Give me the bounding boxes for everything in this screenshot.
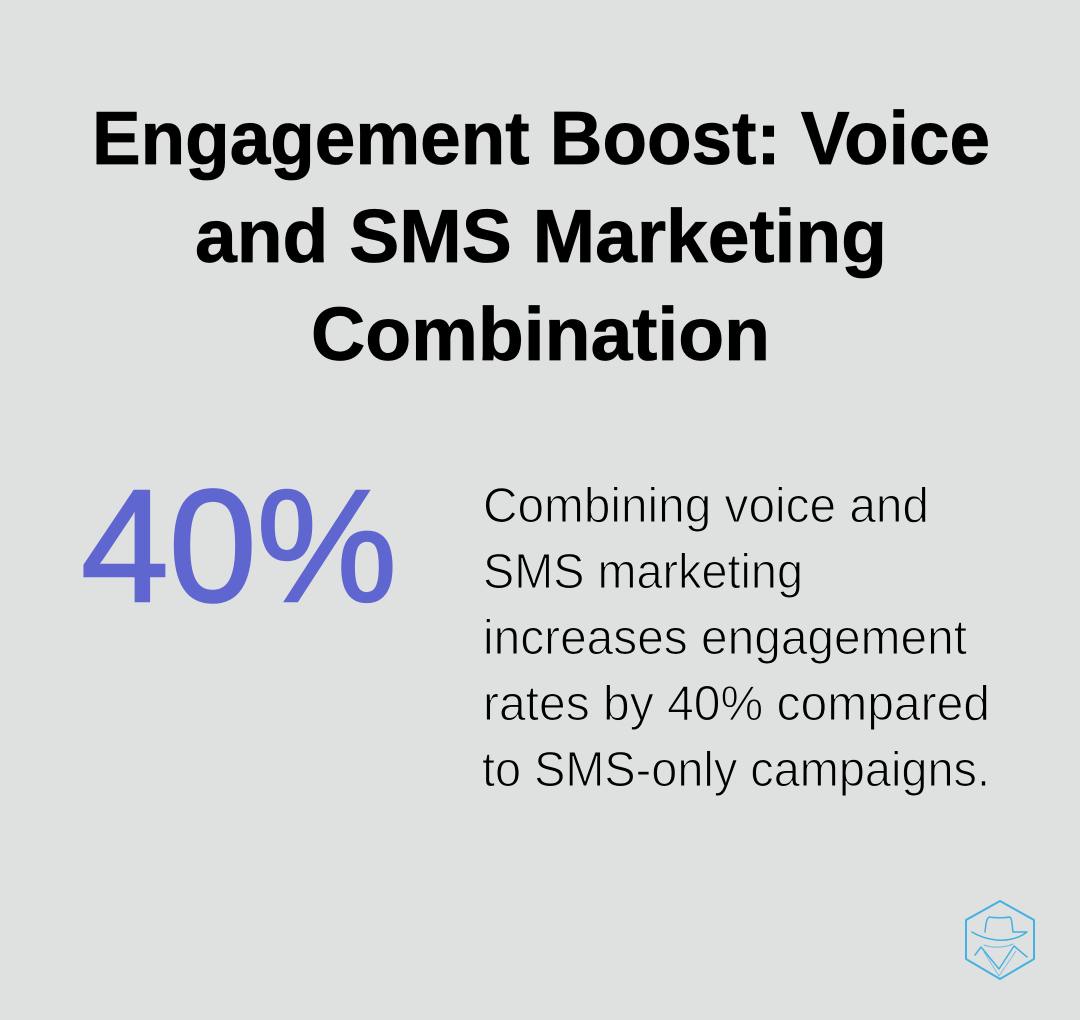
title: Combination (311, 292, 770, 376)
icon: hexagon spy logo (966, 901, 1034, 979)
big statistic: 40%: 40% (81, 456, 397, 635)
description text: rates by 40% compared (483, 677, 990, 731)
description text: to SMS-only campaigns. (482, 743, 990, 797)
title (92, 96, 990, 376)
description text (482, 479, 990, 797)
description text: increases engagement (483, 611, 967, 665)
title: and SMS Marketing (195, 194, 887, 278)
description text: SMS marketing (483, 545, 803, 599)
description text: Combining voice and (483, 479, 929, 533)
title: Engagement Boost: Voice (92, 96, 990, 180)
